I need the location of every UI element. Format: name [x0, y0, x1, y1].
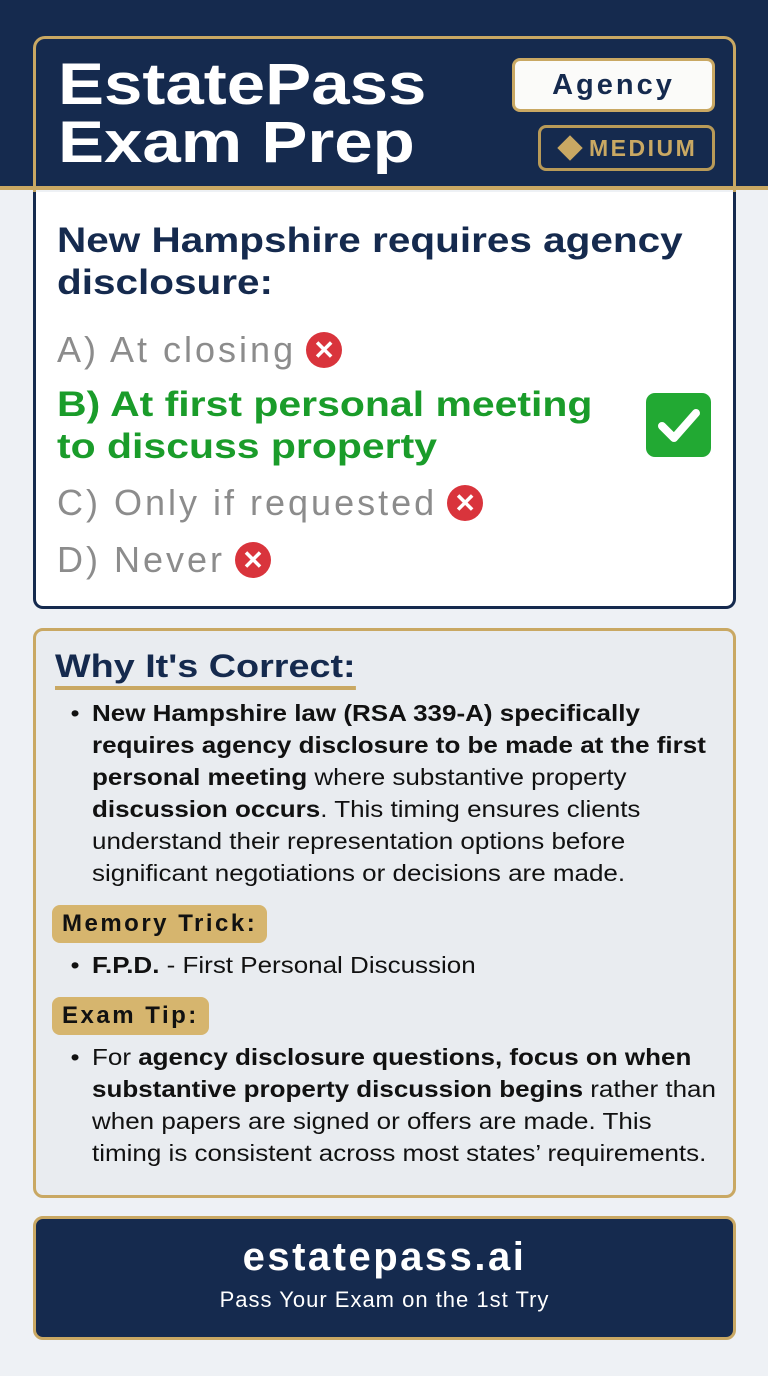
explanation text: New Hampshire law (RSA 339-A) specifically	[92, 700, 640, 726]
label: exam tip	[52, 997, 209, 1035]
option C: ✕	[454, 488, 476, 518]
label: memory trick: Memory Trick:	[62, 910, 257, 937]
option D: ✕	[242, 545, 264, 575]
option B correct: to discuss property	[57, 427, 437, 466]
footer url: estatepass.ai	[243, 1235, 526, 1279]
explanation text: requires agency disclosure to be made at the first	[92, 732, 706, 758]
title: Exam Prep	[58, 110, 415, 175]
explanation text: personal meeting where substantive property	[92, 764, 626, 790]
option B correct: B) At first personal meeting	[57, 385, 592, 424]
exam tip text: when papers are signed or offers are made. This	[92, 1108, 652, 1134]
question text: New Hampshire requires agency	[57, 221, 683, 260]
badge: Agency	[512, 58, 715, 112]
option C: C) Only if requested	[57, 482, 437, 523]
option A: ✕	[313, 335, 335, 365]
explanation text: understand their representation options before	[92, 828, 625, 854]
question text	[57, 221, 683, 302]
footer	[33, 1216, 736, 1340]
option B correct	[57, 385, 592, 466]
heading: why it's correct: Why It's Correct:	[55, 648, 356, 684]
label: exam tip: Exam Tip:	[62, 1002, 199, 1029]
footer tagline: Pass Your Exam on the 1st Try	[220, 1287, 549, 1312]
badge: medium difficulty	[538, 125, 715, 171]
exam tip text	[71, 1044, 716, 1166]
header frame	[33, 36, 736, 192]
exam tip text: substantive property discussion begins rather than	[92, 1076, 716, 1102]
explanation text	[71, 700, 706, 886]
explanation text: significant negotiations or decisions are made.	[92, 860, 625, 886]
option A: A) At closing	[57, 329, 296, 370]
header band	[0, 0, 768, 190]
title	[58, 52, 426, 175]
badge: Agency: Agency	[552, 69, 675, 101]
title: EstatePass	[58, 52, 426, 117]
icon: green check	[646, 393, 711, 457]
option D: D) Never	[57, 539, 225, 580]
text: •	[71, 952, 80, 978]
badge: medium difficulty: MEDIUM	[589, 135, 697, 161]
question text: disclosure:	[57, 263, 273, 302]
panel: explanation	[33, 628, 736, 1198]
panel: question card	[33, 192, 736, 609]
explanation text: discussion occurs. This timing ensures clients	[92, 796, 640, 822]
text: •	[71, 700, 80, 726]
exam tip text: timing is consistent across most states’ requirements.	[92, 1140, 706, 1166]
exam tip text: For agency disclosure questions, focus on when	[92, 1044, 691, 1070]
label: memory trick	[52, 905, 267, 943]
memory trick text: F.P.D. - First Personal Discussion	[92, 952, 476, 978]
text: •	[71, 1044, 80, 1070]
